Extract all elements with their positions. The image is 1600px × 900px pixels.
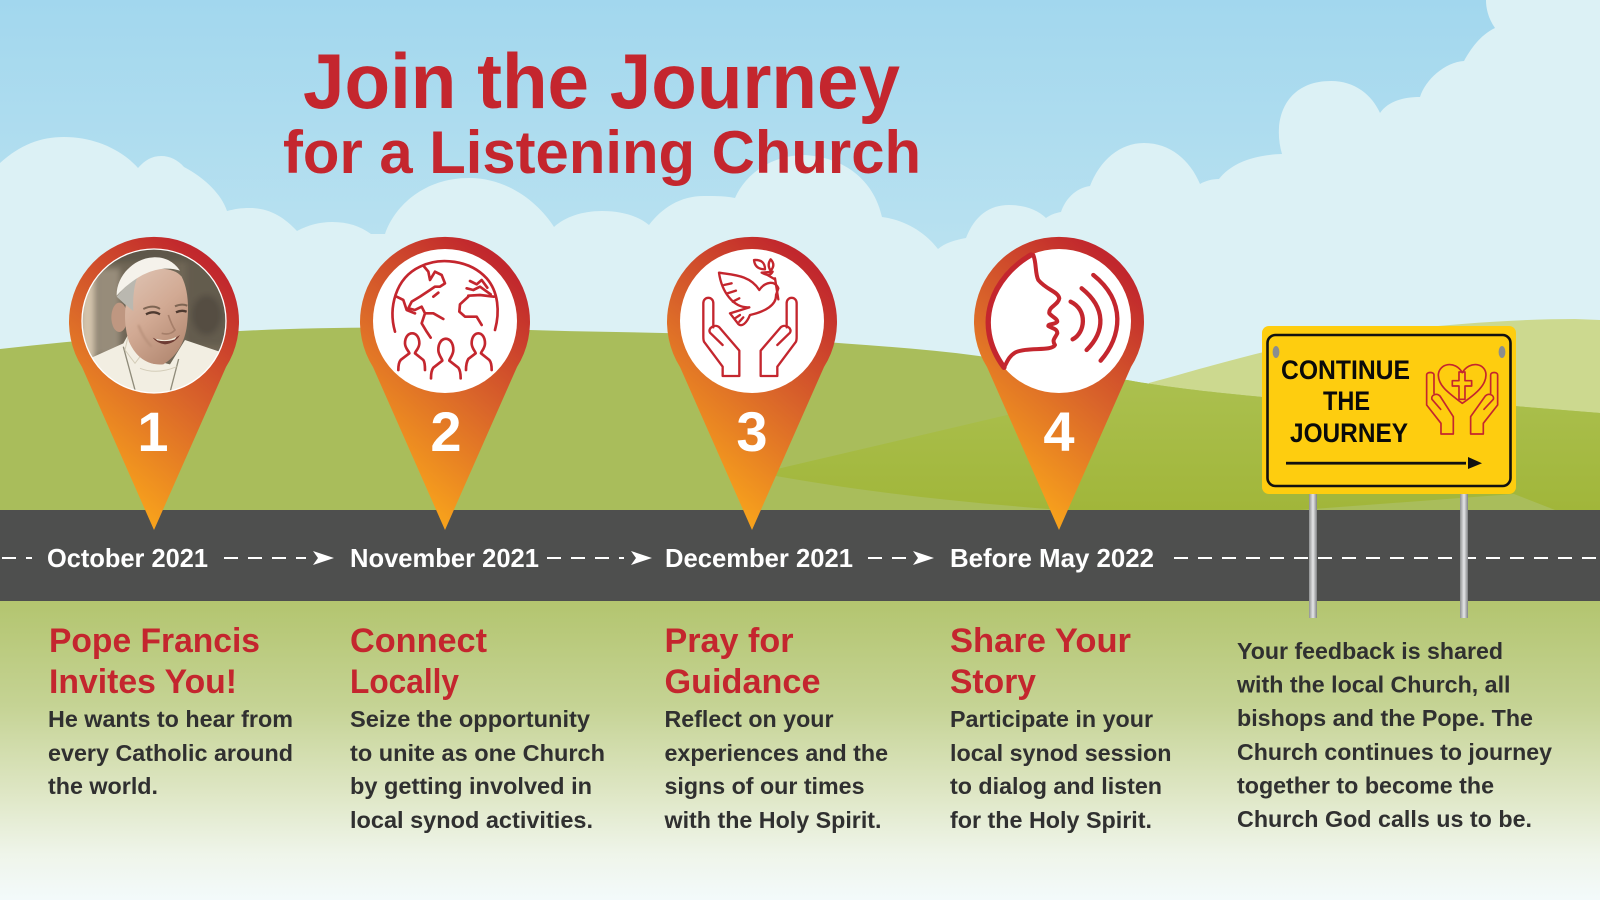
background: clouds bbox=[0, 0, 1600, 420]
step 4 text: Share Your Story: local synod session bbox=[950, 740, 1172, 766]
closing text: feedback: together to become the bbox=[1237, 772, 1494, 798]
step 3 text: Pray for Guidance bbox=[663, 622, 888, 833]
icon: dove above open hands bbox=[703, 259, 797, 376]
step 1 text: Pope Francis Invites You bbox=[48, 622, 293, 799]
title bbox=[283, 37, 921, 186]
step 1 text: Pope Francis Invites You: Pope Francis bbox=[49, 622, 260, 660]
pin 4: speaking profile bbox=[974, 237, 1144, 530]
step 3 text: Pray for Guidance: with the Holy Spirit. bbox=[663, 807, 882, 833]
date labels bbox=[47, 543, 1154, 573]
icon: globe with people bbox=[393, 261, 498, 378]
arrows between dates bbox=[313, 551, 934, 565]
closing text: feedback: Church continues to journey bbox=[1237, 739, 1552, 765]
step 2 text: Connect Locally: Locally bbox=[350, 663, 459, 701]
step 2 text: Connect Locally: local synod activities. bbox=[350, 807, 593, 833]
number 4: 4 bbox=[1043, 400, 1075, 463]
date labels: October 2021 bbox=[47, 543, 208, 573]
closing text: feedback bbox=[1236, 638, 1552, 832]
step 1 text: Pope Francis Invites You: Invites You! bbox=[49, 663, 237, 701]
closing text: feedback: with the local Church, all bbox=[1236, 672, 1510, 698]
title: for a Listening Church bbox=[283, 119, 921, 186]
road sign: continue the journey bbox=[1262, 326, 1516, 494]
signposts bbox=[1309, 490, 1468, 618]
background: ground bbox=[0, 601, 1600, 900]
step 2 text: Connect Locally: Seize the opportunity bbox=[350, 706, 590, 732]
road centre dashes bbox=[2, 557, 1600, 559]
road sign: continue the journey: JOURNEY bbox=[1290, 418, 1408, 448]
number 3: 3 bbox=[736, 400, 768, 463]
step 4 text: Share Your Story bbox=[950, 622, 1172, 833]
pin 1: Pope Francis bbox=[69, 237, 239, 530]
closing text: feedback: bishops and the Pope. The bbox=[1237, 705, 1533, 731]
step 3 text: Pray for Guidance: Pray for bbox=[664, 622, 794, 660]
step 4 text: Share Your Story: for the Holy Spirit. bbox=[950, 807, 1152, 833]
icon: hands holding heart with cross bbox=[1427, 365, 1498, 434]
date labels: Before May 2022 bbox=[950, 543, 1154, 573]
pin 3: dove and hands bbox=[667, 237, 837, 530]
closing text: feedback: Your feedback is shared bbox=[1237, 638, 1503, 664]
closing text: feedback: Church God calls us to be. bbox=[1237, 806, 1532, 832]
road bbox=[0, 510, 1600, 601]
background: hills bbox=[0, 319, 1600, 520]
step 4 text: Share Your Story: Story bbox=[950, 663, 1036, 701]
step 1 text: Pope Francis Invites You: every Catholic around bbox=[48, 740, 293, 766]
sign arrow bbox=[1286, 457, 1482, 469]
step 1 text: Pope Francis Invites You: the world. bbox=[48, 773, 158, 799]
title: Join the Journey bbox=[303, 37, 900, 125]
number 2: 2 bbox=[430, 400, 462, 463]
road sign: continue the journey: THE bbox=[1323, 386, 1370, 416]
step 3 text: Pray for Guidance: experiences and the bbox=[664, 740, 888, 766]
step 1 text: Pope Francis Invites You: He wants to hear from bbox=[48, 706, 293, 732]
step 4 text: Share Your Story: Participate in your bbox=[950, 706, 1153, 732]
date labels: December 2021 bbox=[665, 543, 853, 573]
date labels: November 2021 bbox=[350, 543, 539, 573]
background: sky bbox=[0, 0, 1600, 520]
step 2 text: Connect Locally: Connect bbox=[350, 622, 487, 660]
photo: Pope Francis portrait bbox=[81, 248, 227, 394]
step 3 text: Pray for Guidance: signs of our times bbox=[664, 773, 864, 799]
number 1: 1 bbox=[137, 400, 169, 463]
road sign: continue the journey: CONTINUE bbox=[1281, 355, 1410, 385]
pin 2: globe and people bbox=[360, 237, 530, 530]
step 3 text: Pray for Guidance: Guidance bbox=[664, 663, 820, 701]
step 2 text: Connect Locally: by getting involved in bbox=[350, 773, 592, 799]
step 2 text: Connect Locally: to unite as one Church bbox=[350, 740, 605, 766]
step 4 text: Share Your Story: Share Your bbox=[950, 622, 1131, 660]
step 2 text: Connect Locally bbox=[350, 622, 605, 833]
step 3 text: Pray for Guidance: Reflect on your bbox=[664, 706, 834, 732]
icon: speaking face with sound waves bbox=[988, 255, 1117, 367]
step 4 text: Share Your Story: to dialog and listen bbox=[950, 773, 1162, 799]
